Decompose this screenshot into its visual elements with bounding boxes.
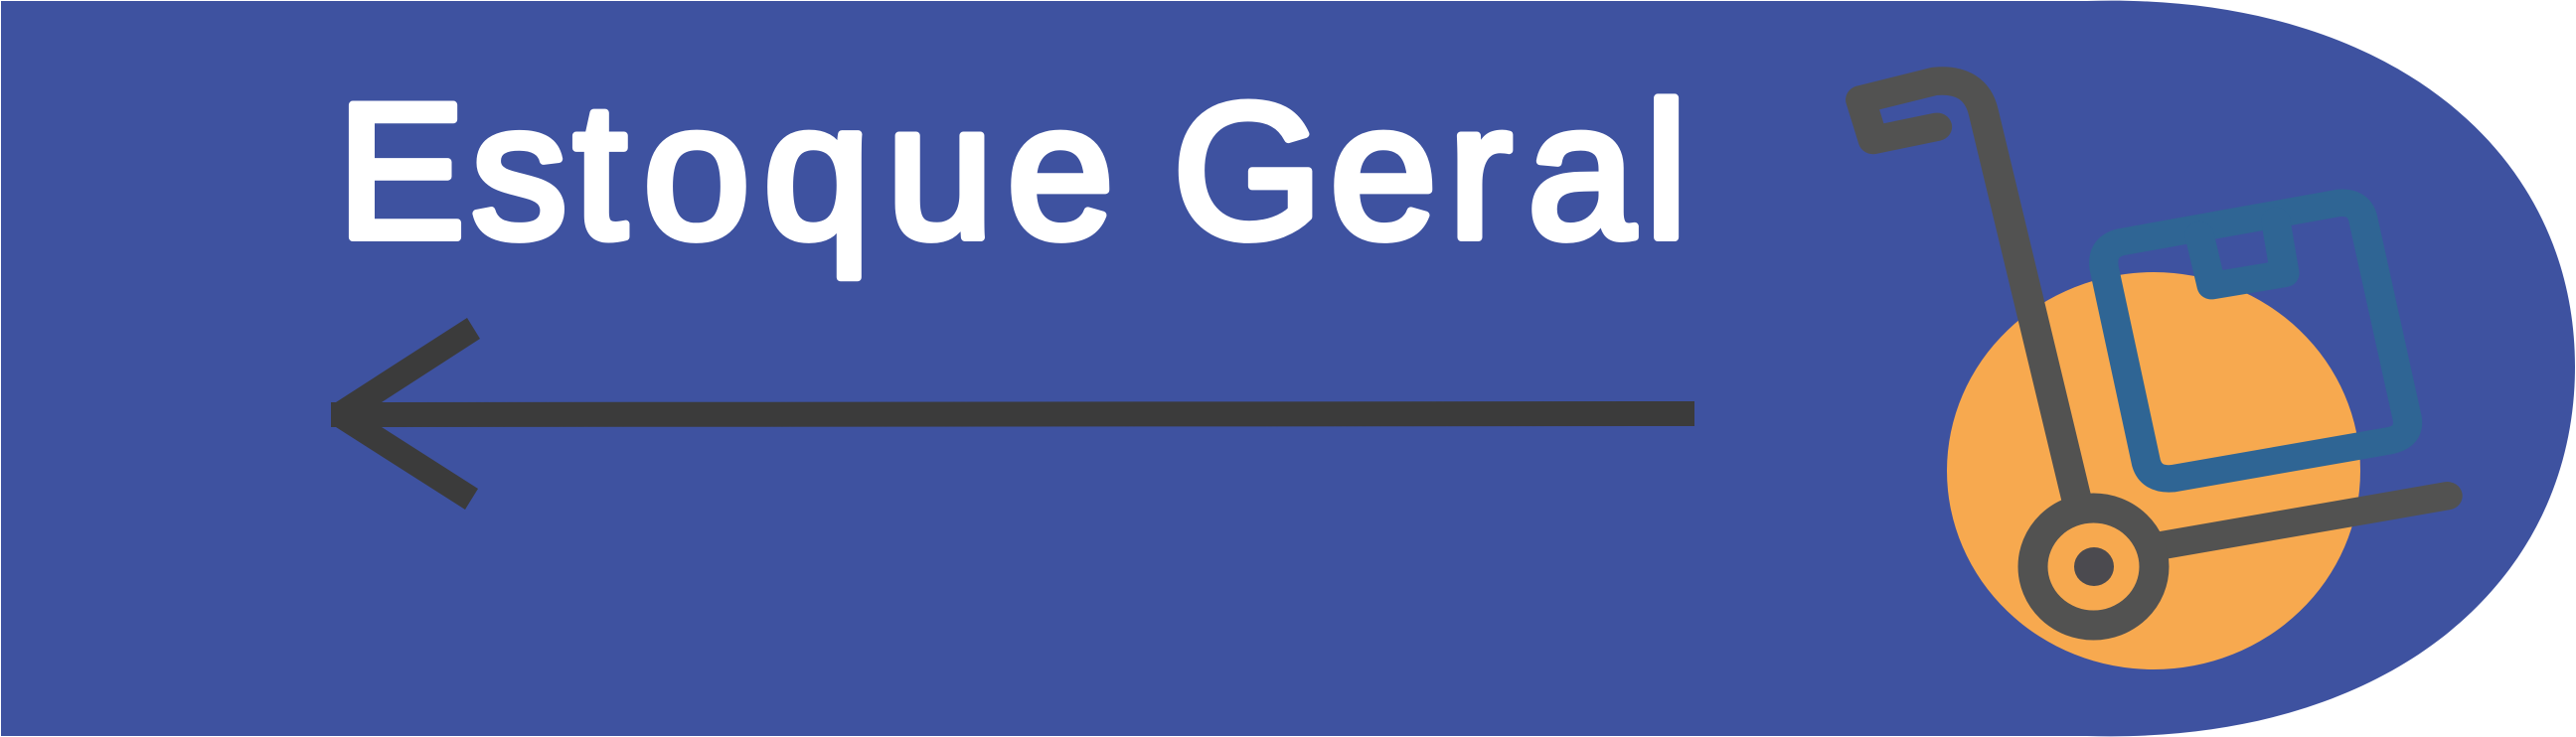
icon: hand truck with box (1860, 80, 2448, 669)
arrow pointing left (331, 318, 1694, 510)
icon: box (2104, 203, 2408, 479)
icon: axle (2163, 496, 2448, 545)
icon: hand truck handle (1860, 80, 2077, 503)
icon: box tape (2199, 221, 2285, 286)
icon: wheel (2033, 509, 2155, 626)
icon: orange circle backdrop (1947, 272, 2360, 669)
icon: wheel hub (2074, 547, 2114, 586)
title: Estoque Geral (337, 64, 1688, 279)
